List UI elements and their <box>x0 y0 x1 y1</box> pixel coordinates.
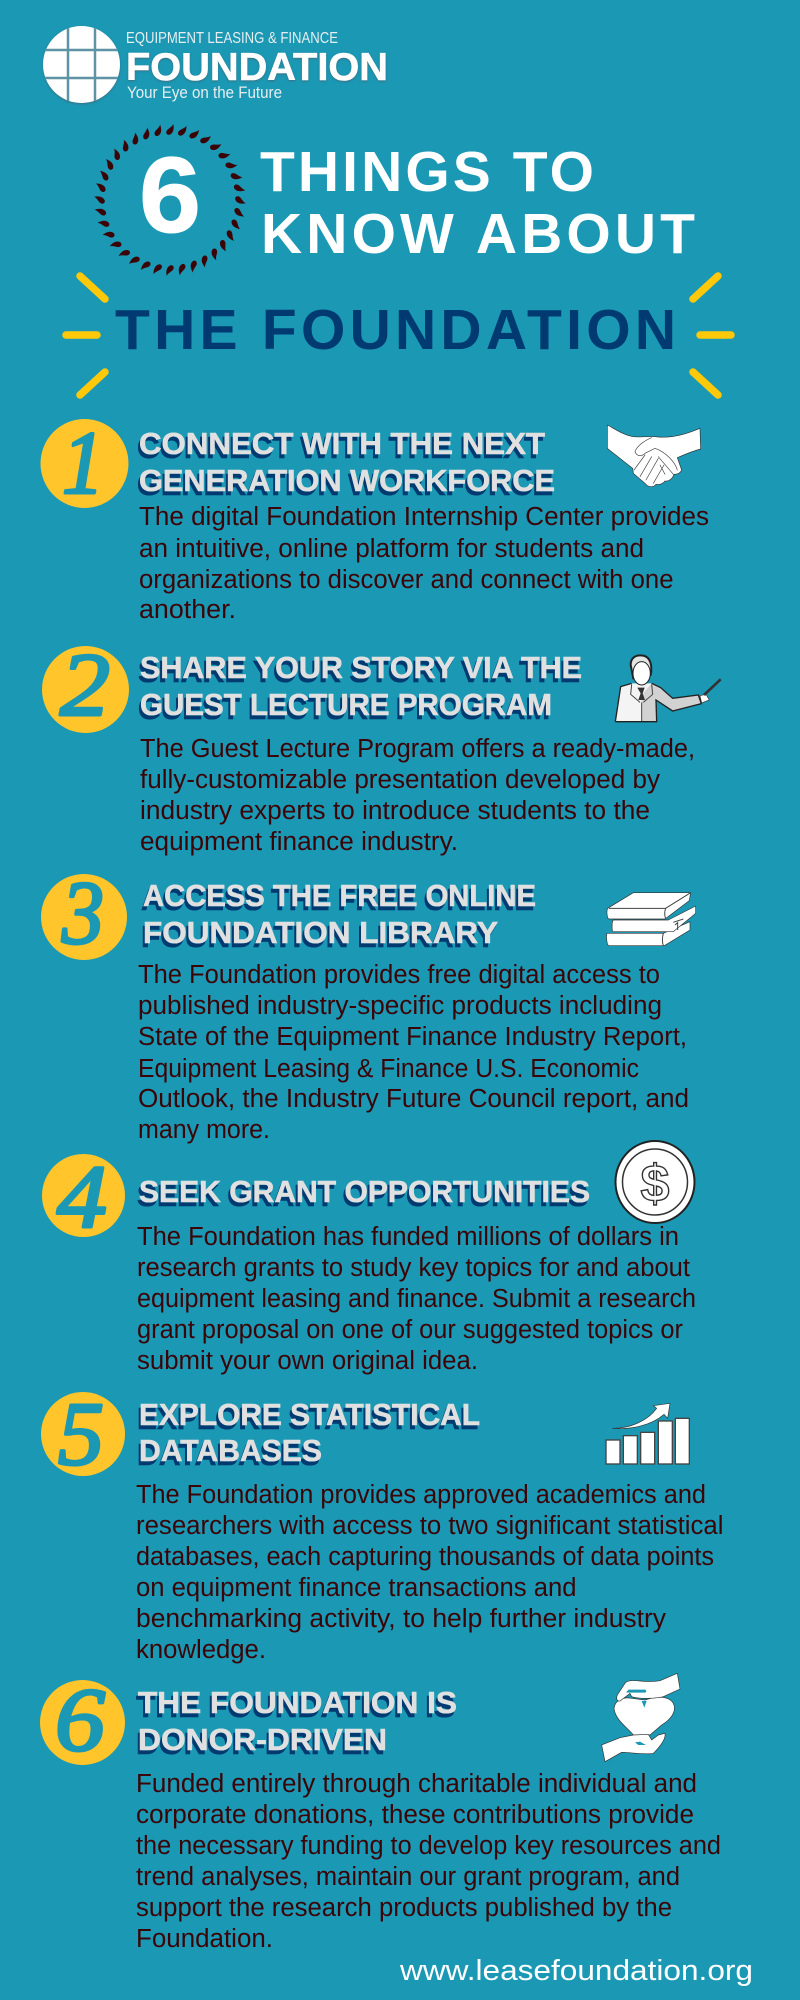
panel: item 3 <box>41 864 696 1144</box>
heading 3: FOUNDATION LIBRARY <box>143 915 498 950</box>
icon: stack of books <box>607 893 696 946</box>
body text 4: research grants to study key topics for and about <box>137 1254 690 1282</box>
body text 5: The Foundation provides approved academics and <box>136 1481 706 1509</box>
title <box>260 140 695 266</box>
body text 3: State of the Equipment Finance Industry Report, <box>138 1023 687 1051</box>
panel: item 4 <box>42 1141 696 1375</box>
body text 1: organizations to discover and connect with one <box>139 566 674 594</box>
number badge 6 <box>40 1671 125 1770</box>
logo text: FOUNDATION <box>126 46 388 89</box>
body text 1: The digital Foundation Internship Center provides <box>139 503 709 531</box>
number badge 6: 6 <box>55 1671 105 1770</box>
body text 1 <box>139 503 709 624</box>
heading 1: CONNECT WITH THE NEXT <box>139 426 545 461</box>
panel: item 2 <box>42 636 721 856</box>
icon: presenter <box>615 655 721 722</box>
heading 4: SEEK GRANT OPPORTUNITIES <box>139 1174 590 1209</box>
heading 3 <box>143 878 536 950</box>
panel: item 6 <box>40 1671 721 1953</box>
body text 6: Foundation. <box>136 1925 273 1953</box>
body text 6: Funded entirely through charitable individual and <box>136 1770 697 1798</box>
body text 3: Outlook, the Industry Future Council report, and <box>138 1085 689 1113</box>
icon: hands holding heart <box>602 1673 680 1762</box>
heading 6 <box>138 1685 457 1757</box>
heading 5 <box>139 1397 480 1468</box>
heading 2 <box>140 650 582 722</box>
body text 4: grant proposal on one of our suggested topics or <box>137 1316 683 1344</box>
body text 6: the necessary funding to develop key resources and <box>136 1832 721 1860</box>
body text 3: The Foundation provides free digital access to <box>138 961 660 989</box>
heading 2: SHARE YOUR STORY VIA THE <box>140 650 582 685</box>
heading 6: DONOR-DRIVEN <box>138 1722 387 1757</box>
body text 6 <box>136 1770 721 1953</box>
body text 6: corporate donations, these contributions provide <box>136 1801 694 1829</box>
title: KNOW ABOUT <box>261 202 695 266</box>
heading 6: THE FOUNDATION IS <box>138 1685 457 1720</box>
subtitle: the foundation: THE FOUNDATION <box>115 298 676 362</box>
body text 3: Equipment Leasing & Finance U.S. Economic <box>138 1055 639 1083</box>
body text 5: databases, each capturing thousands of data points <box>136 1543 714 1571</box>
heading 2: GUEST LECTURE PROGRAM <box>140 687 552 722</box>
yellow burst rays <box>66 276 731 395</box>
body text 5: on equipment finance transactions and <box>136 1574 576 1602</box>
body text 3: many more. <box>138 1116 270 1144</box>
icon: dollar coin: $ <box>641 1155 670 1213</box>
panel: item 1 <box>40 414 709 624</box>
number badge 4 <box>42 1148 125 1247</box>
logo text <box>126 30 388 102</box>
footer url: www.leasefoundation.org <box>399 1955 753 1987</box>
body text 5 <box>136 1481 724 1664</box>
number badge 1: 1 <box>62 414 104 513</box>
body text 1: another. <box>139 596 236 624</box>
body text 1: an intuitive, online platform for students and <box>139 535 644 563</box>
body text 2: The Guest Lecture Program offers a ready-made, <box>140 735 695 763</box>
number badge 1 <box>40 414 128 513</box>
heading 5: DATABASES <box>139 1433 322 1468</box>
body text 4: The Foundation has funded millions of dollars in <box>137 1223 679 1251</box>
icon: dollar coin <box>616 1141 694 1223</box>
number badge 5: 5 <box>58 1385 104 1484</box>
icon: ring of teardrops <box>93 123 247 277</box>
body text 5: researchers with access to two significant statistical <box>136 1512 724 1540</box>
logo globe icon <box>43 26 120 103</box>
body text 4: submit your own original idea. <box>137 1347 478 1375</box>
body text 4 <box>137 1223 696 1375</box>
body text 5: knowledge. <box>136 1636 266 1664</box>
title: THINGS TO <box>260 140 594 204</box>
heading 3: ACCESS THE FREE ONLINE <box>143 878 536 913</box>
icon: handshake <box>607 425 701 487</box>
body text 6: support the research products published by the <box>136 1894 672 1922</box>
body text 2: fully-customizable presentation developed by <box>140 766 660 794</box>
body text 2 <box>140 735 695 856</box>
number badge 3 <box>41 864 127 963</box>
number badge 2: 2 <box>60 636 110 735</box>
heading 1 <box>139 426 555 498</box>
logo <box>43 26 388 103</box>
icon: rising bar chart <box>606 1403 689 1464</box>
number badge 4: 4 <box>57 1148 107 1247</box>
number badge 3: 3 <box>61 864 104 963</box>
number badge 2 <box>42 636 129 735</box>
title numeral 6: 6 <box>139 134 201 255</box>
panel: item 5 <box>41 1385 724 1664</box>
heading 1: GENERATION WORKFORCE <box>139 463 555 498</box>
body text 3 <box>138 961 689 1144</box>
body text 6: trend analyses, maintain our grant program, and <box>136 1863 680 1891</box>
logo text: Your Eye on the Future <box>127 83 282 102</box>
body text 2: equipment finance industry. <box>140 828 458 856</box>
body text 3: published industry-specific products including <box>138 992 662 1020</box>
logo text: EQUIPMENT LEASING & FINANCE <box>126 30 338 47</box>
number badge 5 <box>41 1385 125 1484</box>
body text 5: benchmarking activity, to help further industry <box>136 1605 666 1633</box>
heading 5: EXPLORE STATISTICAL <box>139 1397 480 1432</box>
body text 4: equipment leasing and finance. Submit a research <box>137 1285 696 1313</box>
body text 2: industry experts to introduce students to the <box>140 797 650 825</box>
